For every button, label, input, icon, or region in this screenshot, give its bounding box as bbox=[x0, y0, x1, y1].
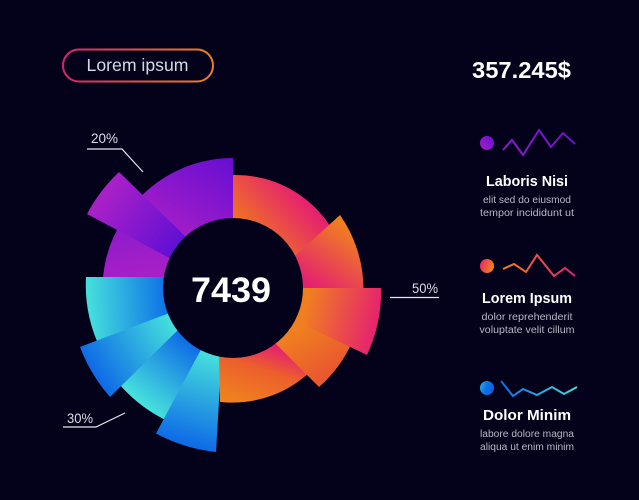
heading: Lorem Ipsum bbox=[482, 291, 572, 307]
title pill bbox=[63, 50, 213, 82]
description: dolor reprehenderit bbox=[482, 312, 573, 323]
center circle bbox=[163, 218, 303, 358]
blue segments bbox=[80, 277, 222, 452]
total amount: 357.245$ bbox=[472, 57, 571, 83]
purple segments bbox=[87, 158, 233, 278]
callout: 30%: 30% bbox=[67, 411, 93, 426]
sparkline: orange bbox=[503, 255, 575, 276]
callout: 20% bbox=[87, 131, 143, 172]
legend: Laboris Nisi bbox=[480, 130, 575, 219]
legend: Dolor Minim bbox=[480, 381, 577, 453]
title pill: Lorem ipsum bbox=[86, 55, 188, 75]
heading: Laboris Nisi bbox=[486, 174, 568, 190]
description: labore dolore magna bbox=[480, 429, 574, 440]
orange and pink segments bbox=[219, 175, 381, 403]
description: tempor incididunt ut bbox=[480, 208, 574, 219]
callout: 50% bbox=[390, 281, 439, 298]
callout: 50%: 50% bbox=[412, 281, 438, 296]
callout: 30% bbox=[63, 411, 125, 427]
description: elit sed do eiusmod bbox=[483, 195, 571, 206]
sparkline: blue bbox=[501, 381, 577, 396]
legend: Lorem Ipsum bbox=[480, 255, 575, 336]
icon: blue dot bbox=[480, 381, 494, 395]
description: voluptate velit cillum bbox=[480, 325, 574, 336]
callout: 20%: 20% bbox=[91, 131, 118, 146]
description: aliqua ut enim minim bbox=[480, 442, 574, 453]
center value: 7439 bbox=[191, 271, 271, 310]
radial chart bbox=[80, 158, 381, 452]
sparkline: purple bbox=[503, 130, 575, 155]
heading: Dolor Minim bbox=[483, 408, 571, 424]
icon: purple dot bbox=[480, 136, 494, 150]
icon: orange dot bbox=[480, 259, 494, 273]
